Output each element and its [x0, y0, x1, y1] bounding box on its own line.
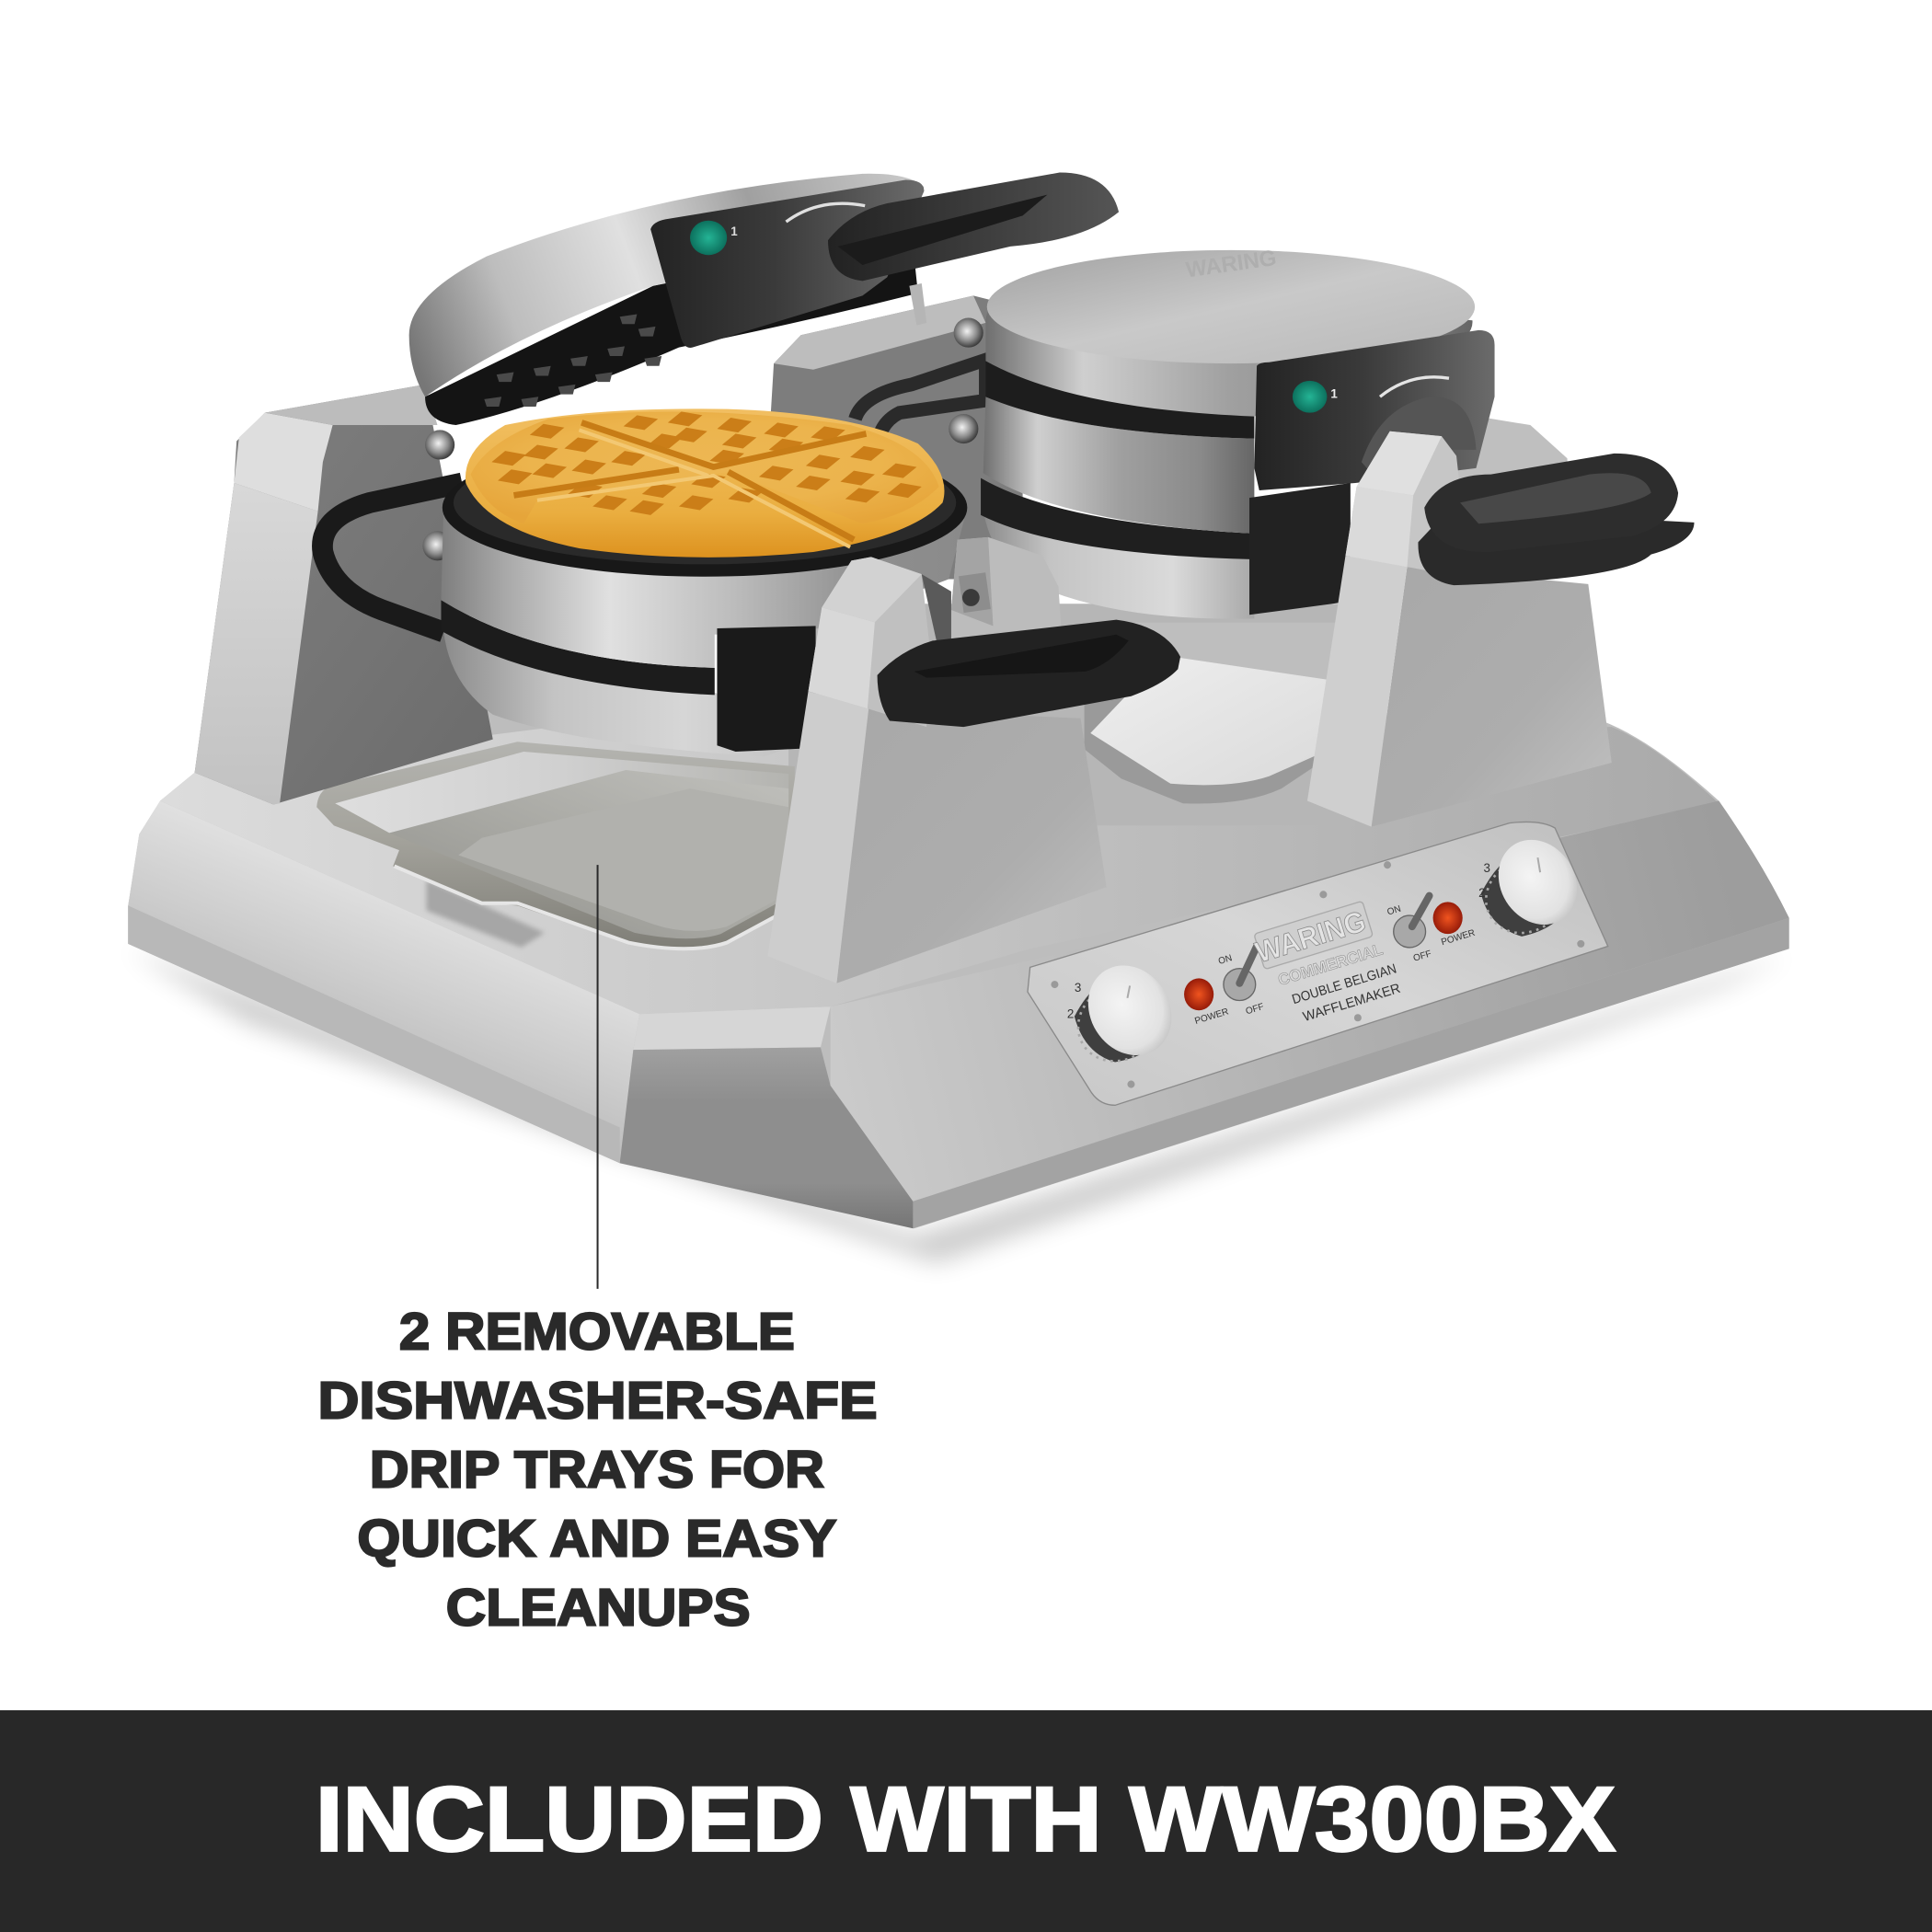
lifted handle — [828, 173, 1119, 281]
black band — [441, 600, 715, 695]
hinge housing — [1254, 330, 1495, 490]
embossed logo: WARING — [1251, 904, 1370, 969]
dial numbers — [1067, 861, 1490, 1020]
panel labels — [1193, 904, 1477, 1027]
upper black band — [985, 361, 1254, 439]
right knob — [1472, 825, 1593, 948]
banner heading: INCLUDED WITH WW300BX — [316, 1769, 1616, 1871]
black rim — [443, 439, 967, 577]
waffle ridge highlights — [537, 430, 850, 547]
lid steel shell — [409, 174, 924, 397]
left toggle switch — [1224, 947, 1257, 1001]
left waffle iron, open — [322, 173, 1119, 756]
right waffle iron, closed — [981, 246, 1568, 619]
indicator light — [690, 221, 727, 255]
dial numbers: 2 — [1067, 1006, 1074, 1020]
left back post — [195, 385, 493, 805]
power cord — [322, 483, 462, 632]
post body — [836, 708, 1107, 983]
lid underside plate — [425, 234, 918, 425]
panel labels: POWER — [1440, 928, 1477, 948]
callout text: DISHWASHER-SAFE — [318, 1372, 878, 1430]
tray inner flat — [458, 788, 788, 931]
front handle — [878, 620, 1180, 727]
embossed logo: COMMERCIAL — [1276, 939, 1386, 989]
hinge bolts — [425, 430, 454, 460]
product name: DOUBLE BELGIAN — [1291, 961, 1398, 1007]
tray upper band — [335, 752, 788, 833]
lower pan — [982, 499, 1254, 619]
embossed logo on lid: WARING — [1184, 246, 1278, 282]
rear bracket behind handle — [1442, 417, 1568, 517]
front post — [767, 537, 1107, 983]
right power light — [1433, 902, 1463, 934]
control panel — [1028, 822, 1608, 1105]
callout text: 2 REMOVABLE — [399, 1303, 795, 1361]
ground shadow — [128, 949, 1789, 1263]
dial numbers: 3 — [1075, 981, 1081, 995]
latch pin — [909, 283, 926, 326]
callout text: DRIP TRAYS FOR — [370, 1441, 824, 1499]
rear bracket — [949, 537, 1062, 640]
number one: 1 — [1330, 387, 1338, 401]
left power light — [1184, 978, 1213, 1010]
left knob — [1064, 949, 1188, 1076]
right front post — [1307, 431, 1612, 827]
mechanism behind post — [922, 574, 951, 640]
right toggle switch — [1394, 896, 1430, 948]
panel plate — [1028, 822, 1608, 1105]
lower pan — [443, 631, 813, 756]
product name: WAFFLEMAKER — [1302, 982, 1402, 1025]
panel labels: OFF — [1245, 1002, 1265, 1017]
lid hinge housing — [650, 180, 924, 348]
waffle — [466, 408, 944, 558]
lower block — [1249, 483, 1351, 615]
middle steel band — [983, 397, 1254, 534]
lid wall — [985, 277, 1473, 417]
callout text: CLEANUPS — [446, 1579, 751, 1637]
tray floor — [389, 770, 788, 938]
panel labels: ON — [1217, 953, 1234, 967]
panel labels: ON — [1386, 904, 1402, 917]
center back bracket — [770, 295, 1023, 579]
top surface — [987, 250, 1475, 363]
tray handle shadow — [426, 880, 545, 948]
back filler between the irons — [788, 604, 1355, 825]
callout text — [318, 1303, 878, 1637]
product name — [1291, 961, 1402, 1025]
rotation arrow — [1380, 377, 1449, 397]
waffle grooves — [513, 422, 867, 540]
panel labels: POWER — [1193, 1006, 1230, 1027]
tray rim — [316, 742, 795, 949]
waffle maker illustration — [128, 173, 1789, 1263]
dial numbers: 3 — [1483, 861, 1490, 875]
panel labels: OFF — [1412, 949, 1432, 964]
right handle — [1418, 454, 1695, 585]
steel body — [441, 508, 967, 668]
right drip tray — [1085, 622, 1337, 804]
lower black band — [981, 478, 1254, 559]
leader line to drip tray — [597, 865, 599, 1289]
side block — [717, 626, 816, 752]
waffle pockets — [491, 411, 922, 515]
callout text: QUICK AND EASY — [357, 1510, 836, 1568]
base unit — [128, 604, 1789, 1228]
bottom banner — [0, 1710, 1932, 1932]
rotation arrow — [786, 203, 865, 222]
indicator light — [1293, 381, 1327, 413]
number one: 1 — [730, 224, 738, 238]
left drip tray — [316, 742, 795, 949]
panel screws — [1051, 844, 1584, 1088]
dial numbers: 2 — [1478, 886, 1486, 900]
